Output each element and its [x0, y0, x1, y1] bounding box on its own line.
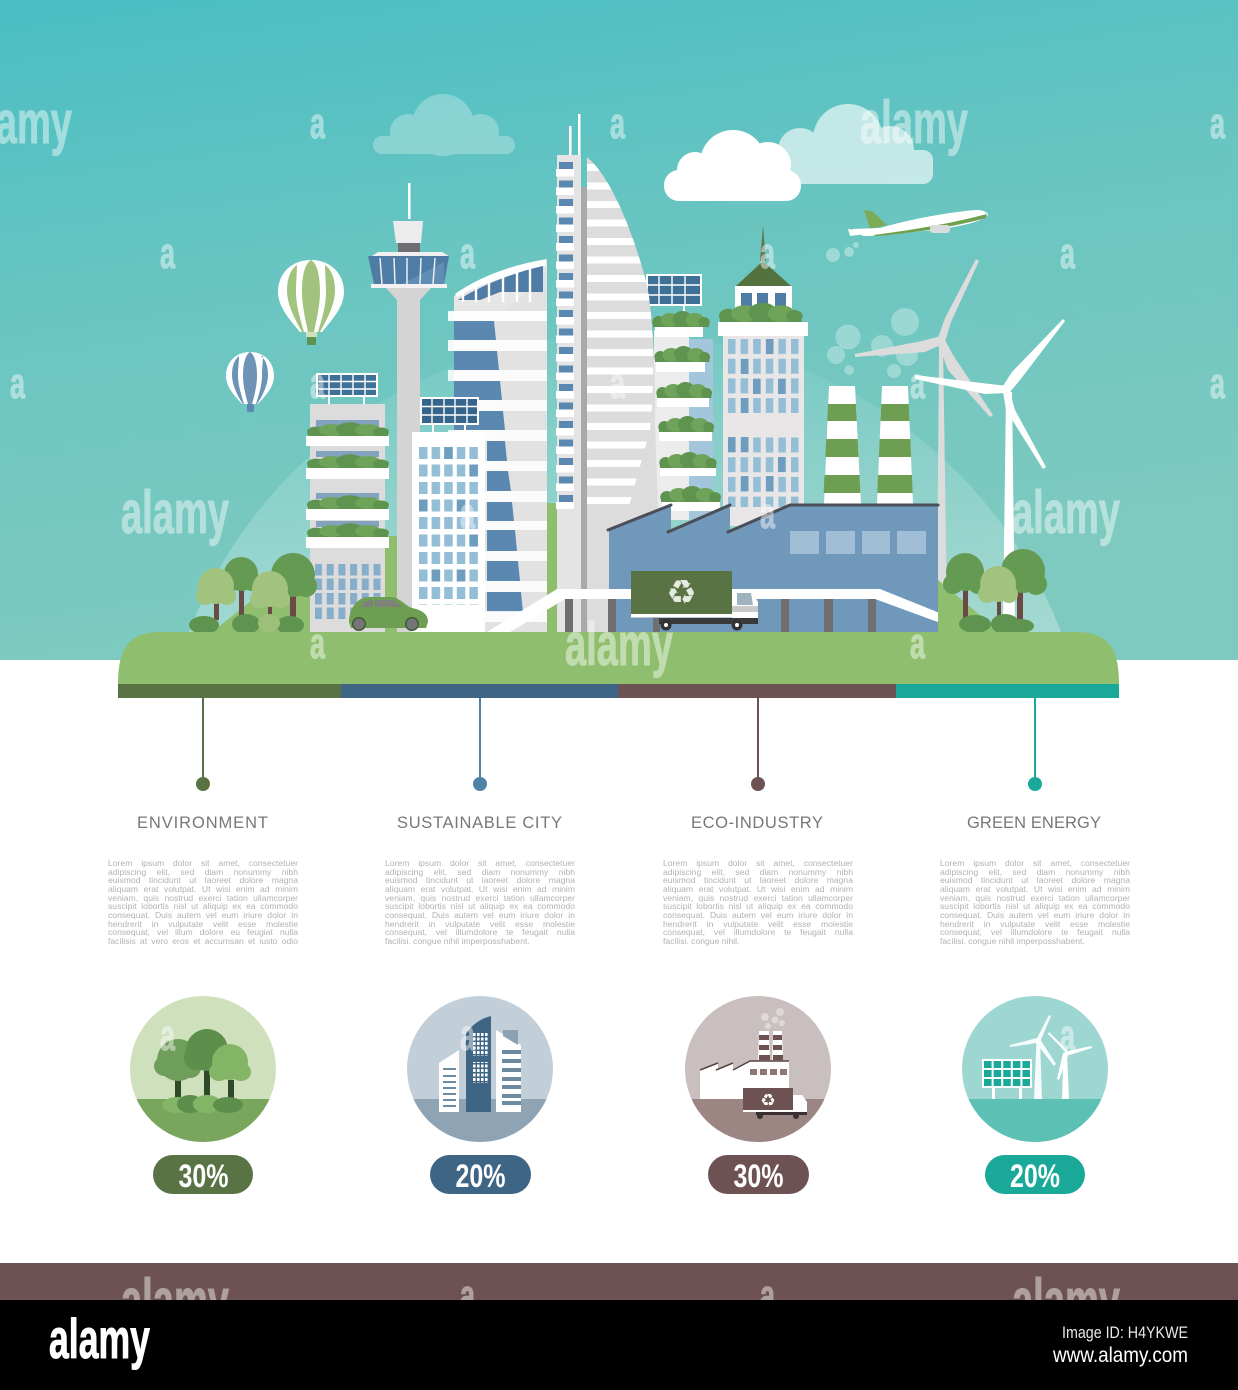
- trees right: [938, 549, 1047, 634]
- watermark overlay: a: [1210, 359, 1225, 408]
- building: terraced green tower left: [306, 374, 389, 632]
- cloud: pale right: [777, 104, 933, 184]
- smoke puffs: [827, 308, 919, 378]
- sky background: [0, 0, 1238, 660]
- building: terraced green tower right: [647, 275, 721, 520]
- text block: green energy: consequat. Duis autem vel eum iriure dolor in: [940, 910, 1130, 920]
- heading: environment: ENVIRONMENT: [137, 814, 268, 832]
- elevated road with pillars: [487, 589, 987, 632]
- text block: sustainable city: adipiscing elit, sed diam nonummy nibh: [385, 867, 575, 877]
- text block: eco-industry: euismod tincidunt ut laoreet dolore magna: [663, 875, 853, 885]
- text block: eco-industry: consequat. Duis autem vel eum iriure dolor in: [663, 910, 853, 920]
- text block: green energy: consequat, vel illumdolore te feugait nulla: [940, 927, 1130, 937]
- text block: environment: adipiscing elit, sed diam nonummy nibh: [108, 867, 298, 877]
- watermark overlay: a: [760, 229, 775, 278]
- watermark overlay: a: [310, 99, 325, 148]
- connector: eco-industry: [751, 698, 765, 791]
- heading: sustainable city: SUSTAINABLE CITY: [397, 814, 562, 832]
- cloud: pale left: [373, 94, 515, 156]
- text block: green energy: Lorem ipsum dolor sit amet, consectetuer: [940, 858, 1130, 868]
- text block: environment: consequat. Duis autem vel eum iriure dolor in: [108, 910, 298, 920]
- website: www.alamy.com: [1052, 1344, 1188, 1367]
- text block: green energy: veniam, quis nostrud exerci tation ullamcorper: [940, 893, 1130, 903]
- watermark overlay: alamy: [121, 1267, 229, 1334]
- text block: green energy: facilisi. congue nihil imperposshabent.: [940, 936, 1085, 946]
- text block: sustainable city: euismod tincidunt ut laoreet dolore magna: [385, 875, 575, 885]
- text block: eco-industry: hendrerit in vulputate velit esse molestie: [663, 919, 853, 929]
- text block: eco-industry: facilisi. congue nihil.: [663, 936, 739, 946]
- smokestacks: [824, 386, 913, 504]
- watermark overlay: a: [760, 1271, 775, 1320]
- text block: green energy: suscipit lobortis nisl ut aliquip ex ea commodo: [940, 901, 1130, 911]
- car: [349, 597, 428, 631]
- solar panel: right terrace: [647, 275, 701, 318]
- text block: green energy: adipiscing elit, sed diam nonummy nibh: [940, 867, 1130, 877]
- heading: eco-industry: ECO-INDUSTRY: [691, 814, 823, 832]
- trees left: [189, 553, 317, 634]
- watermark overlay: a: [610, 359, 625, 408]
- plane vapor puffs: [826, 242, 859, 262]
- text block: environment: facilisis at vero eros et accumsan et iusto odio: [108, 936, 298, 946]
- building: tall slim tower: [556, 114, 587, 632]
- hot air balloon green: [278, 260, 344, 345]
- text block: environment: aliquam erat volutpat. Ut wisi enim ad minim: [108, 884, 298, 894]
- heading: green energy: GREEN ENERGY: [967, 814, 1101, 832]
- halo dome behind city: [179, 334, 1071, 660]
- watermark overlay: a: [460, 489, 475, 538]
- text block: sustainable city: consequat. Duis autem vel eum iriure dolor in: [385, 910, 575, 920]
- building: curved blue tower: [448, 259, 547, 632]
- percent pill: 20% sustainable city: 20%: [456, 1158, 506, 1194]
- bottom band: [0, 1263, 1238, 1300]
- colored category bar: [118, 684, 1119, 698]
- image id: Image ID: H4YKWE: [1062, 1323, 1188, 1342]
- connector: green energy: [1028, 698, 1042, 791]
- watermark overlay: a: [1060, 1011, 1075, 1060]
- watermark overlay: a: [160, 229, 175, 278]
- text block: environment: consequat, vel illum dolore eu feugiat nulla: [108, 927, 298, 937]
- text block: sustainable city: [385, 858, 575, 946]
- percent pill: 20% green energy: 20%: [1010, 1158, 1060, 1194]
- text block: green energy: [940, 858, 1130, 946]
- percent pill: 30% environment: 30%: [178, 1158, 228, 1194]
- text block: sustainable city: Lorem ipsum dolor sit amet, consectetuer: [385, 858, 575, 868]
- wind turbine front: [915, 319, 1065, 625]
- text block: sustainable city: consequat, vel illumdolore te feugait nulla: [385, 927, 575, 937]
- watermark overlay: a: [610, 99, 625, 148]
- watermark overlay: a: [310, 619, 325, 668]
- percent pill: 30% eco-industry: [708, 1155, 809, 1194]
- text block: sustainable city: hendrerit in vulputate velit esse molestie: [385, 919, 575, 929]
- text block: environment: Lorem ipsum dolor sit amet, consectetuer: [108, 858, 298, 868]
- black footer: [0, 1300, 1238, 1390]
- icon circle: factory and truck: ♻: [760, 1091, 776, 1111]
- watermark overlay: alamy: [1012, 1267, 1120, 1334]
- recycling truck: [631, 571, 758, 630]
- text block: environment: suscipit lobortis nisl ut aliquip ex ea commodo: [108, 901, 298, 911]
- green backdrop blocks: [385, 503, 558, 632]
- text block: sustainable city: veniam, quis nostrud exerci tation ullamcorper: [385, 893, 575, 903]
- text block: environment: [108, 858, 298, 946]
- hot air balloon blue: [226, 352, 274, 412]
- percent pill: 30% eco-industry: 30%: [734, 1158, 784, 1194]
- icon: recycling symbol: ♻: [666, 573, 697, 613]
- icon circle: city towers: [407, 996, 553, 1142]
- percent pill: 30% environment: [153, 1155, 253, 1194]
- icon circle: environment trees: [130, 996, 276, 1142]
- text block: green energy: aliquam erat volutpat. Ut wisi enim ad minim: [940, 884, 1130, 894]
- icon circle: factory and truck: [685, 996, 831, 1142]
- text block: green energy: euismod tincidunt ut laoreet dolore magna: [940, 875, 1130, 885]
- percent pill: 20% sustainable city: [430, 1155, 531, 1194]
- building: sail skyscraper: [587, 157, 658, 632]
- icon circle: solar panel and turbines: [962, 996, 1108, 1142]
- airplane: [848, 210, 988, 236]
- text block: environment: hendrerit in vulputate velit esse molestie: [108, 919, 298, 929]
- footer logo: alamy: [49, 1307, 150, 1370]
- watermark overlay: a: [460, 1011, 475, 1060]
- text block: eco-industry: aliquam erat volutpat. Ut wisi enim ad minim: [663, 884, 853, 894]
- text block: eco-industry: veniam, quis nostrud exerci tation ullamcorper: [663, 893, 853, 903]
- watermark overlay: a: [1060, 229, 1075, 278]
- building: white office block: [412, 398, 485, 632]
- text block: green energy: hendrerit in vulputate velit esse molestie: [940, 919, 1130, 929]
- cloud: white: [664, 130, 801, 201]
- text block: eco-industry: [663, 858, 853, 946]
- text block: sustainable city: aliquam erat volutpat. Ut wisi enim ad minim: [385, 884, 575, 894]
- text block: sustainable city: suscipit lobortis nisl ut aliquip ex ea commodo: [385, 901, 575, 911]
- watermark overlay: a: [460, 229, 475, 278]
- watermark overlay: alamy: [860, 89, 968, 156]
- text block: environment: veniam, quis nostrud exerci tation ullamcorper: [108, 893, 298, 903]
- watermark overlay: a: [10, 359, 25, 408]
- watermark overlay: alamy: [121, 479, 229, 546]
- percent pill: 20% green energy: [985, 1155, 1085, 1194]
- watermark overlay: a: [1210, 99, 1225, 148]
- watermark overlay: a: [910, 619, 925, 668]
- connector: sustainable city: [473, 698, 487, 791]
- solar panel: office block: [421, 398, 478, 432]
- building: observation tower: [368, 183, 449, 632]
- factory: [608, 505, 938, 632]
- watermark overlay: a: [910, 359, 925, 408]
- text block: sustainable city: facilisi. congue nihil imperposshabent.: [385, 936, 530, 946]
- building: rooftop tower with spire: [718, 225, 808, 526]
- text block: eco-industry: consequat, vel illumdolore te feugait nulla: [663, 927, 853, 937]
- watermark overlay: a: [460, 1271, 475, 1320]
- text block: eco-industry: adipiscing elit, sed diam nonummy nibh: [663, 867, 853, 877]
- green ground island: [118, 632, 1119, 684]
- connector: environment: [196, 698, 210, 791]
- watermark overlay: a: [760, 489, 775, 538]
- watermark overlay: alamy: [1012, 479, 1120, 546]
- wind turbine back: [855, 259, 993, 610]
- watermark overlay: alamy: [565, 611, 673, 678]
- solar panel: left tower: [317, 374, 377, 404]
- text block: eco-industry: Lorem ipsum dolor sit amet, consectetuer: [663, 858, 853, 868]
- watermark overlay: a: [310, 359, 325, 408]
- text block: eco-industry: suscipit lobortis nisl ut aliquip ex ea commodo: [663, 901, 853, 911]
- watermark overlay: a: [160, 1011, 175, 1060]
- text block: environment: euismod tincidunt ut laoreet dolore magna: [108, 875, 298, 885]
